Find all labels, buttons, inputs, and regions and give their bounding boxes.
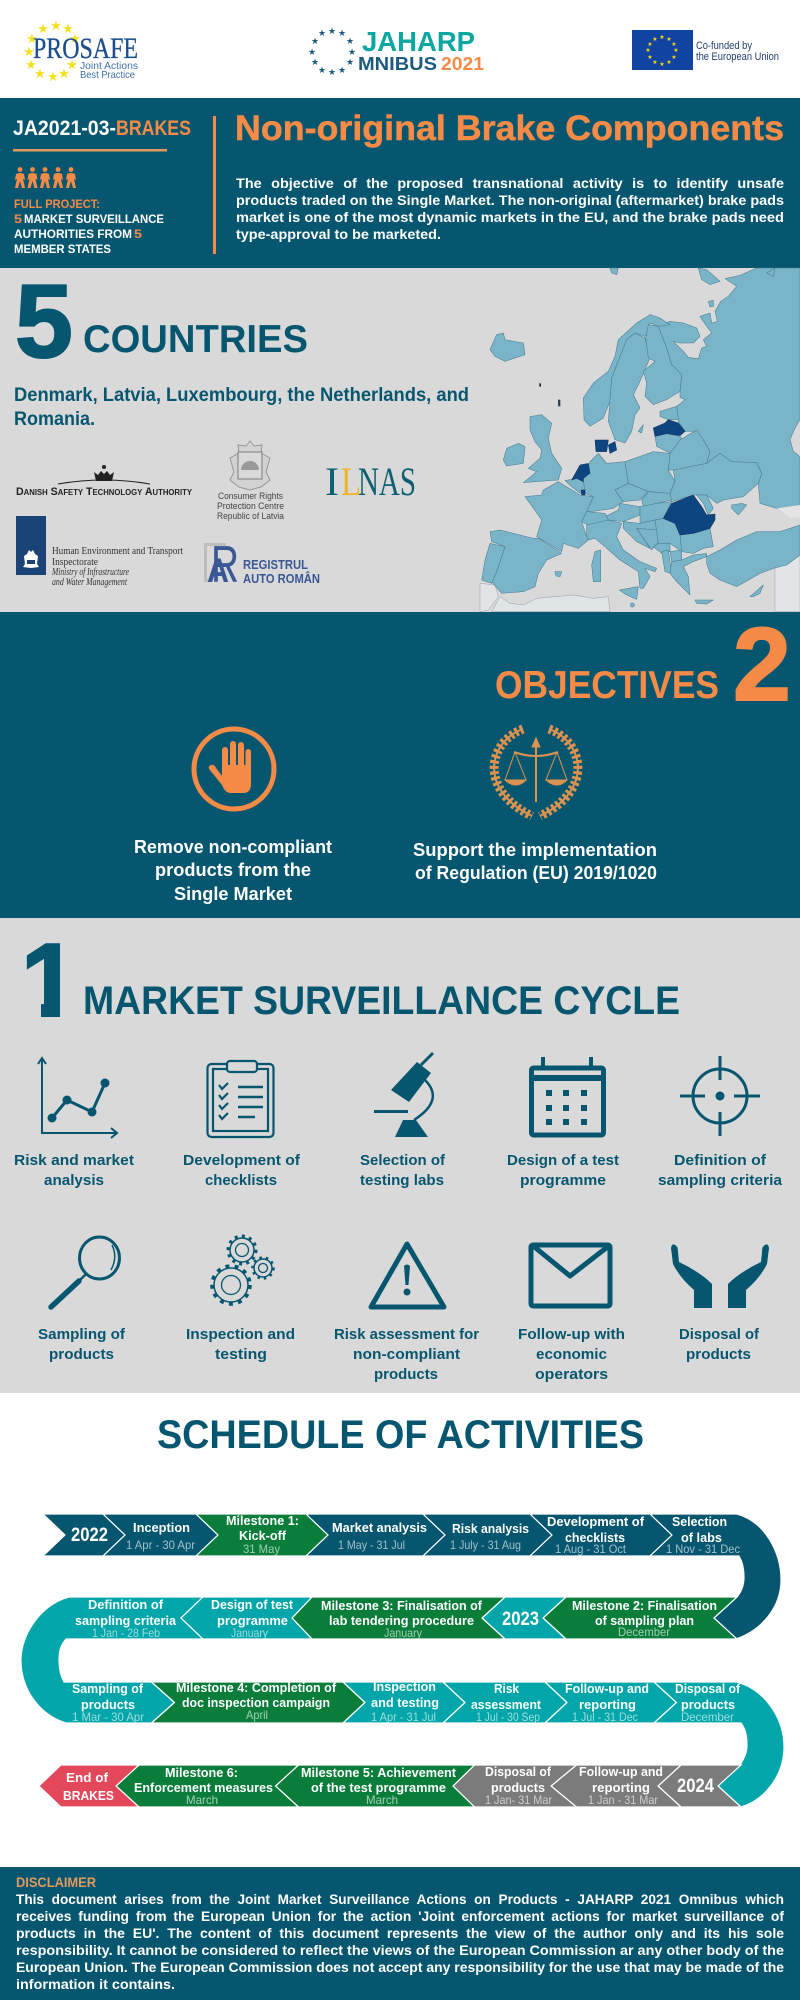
logo: EU co-funded: Co-funded by bbox=[696, 40, 752, 52]
logo: EU co-funded bbox=[632, 30, 779, 70]
row 3 labels: December bbox=[681, 1710, 734, 1724]
full project text: 5 bbox=[134, 227, 142, 241]
label: definition of sampling criteria: sampling criteria bbox=[658, 1172, 783, 1189]
logo: PROSAFE: ★ bbox=[47, 69, 59, 84]
row 4 labels: March bbox=[366, 1793, 398, 1807]
row 1 labels: checklists bbox=[565, 1530, 625, 1545]
row 1 labels: Selection bbox=[672, 1514, 727, 1529]
row 4: 2024 bbox=[39, 1765, 741, 1807]
row 3 labels bbox=[72, 1679, 741, 1724]
label: disposal of products bbox=[679, 1326, 760, 1363]
row 4 labels: Milestone 6: bbox=[165, 1765, 238, 1780]
logo: PROSAFE: ★ bbox=[37, 21, 49, 36]
map of Europe bbox=[480, 268, 800, 612]
row 3 labels: Inspection bbox=[373, 1679, 436, 1694]
disclaimer text: products in the EU'. The content of this document represents the view of the author only and its his sole bbox=[16, 1925, 784, 1941]
objective text: remove products: Remove non-compliant bbox=[134, 837, 332, 857]
row 1 labels bbox=[71, 1513, 740, 1556]
row 1 labels: of labs bbox=[681, 1530, 722, 1545]
logo: EU co-funded: ★ bbox=[647, 54, 653, 61]
logo: JAHARP Omnibus 2021: ★ bbox=[338, 28, 346, 38]
row 3 labels: doc inspection campaign bbox=[182, 1695, 330, 1710]
logo: JAHARP Omnibus 2021: ★ bbox=[346, 36, 354, 46]
label: selection of testing labs: testing labs bbox=[360, 1172, 444, 1189]
label: inspection and testing bbox=[186, 1326, 295, 1363]
country list bbox=[14, 384, 469, 430]
logo: PROSAFE: ★ bbox=[34, 66, 46, 81]
row 2 labels: 1 Jan - 28 Feb bbox=[92, 1626, 160, 1640]
logo: PROSAFE: ★ bbox=[58, 66, 70, 81]
row 2: 2023 bbox=[181, 1597, 737, 1639]
row 2 labels: sampling criteria bbox=[75, 1613, 177, 1628]
icon: magnifier bbox=[51, 1237, 120, 1307]
logo: PROSAFE: Joint Actions bbox=[80, 60, 138, 72]
objective text: remove products bbox=[134, 837, 332, 904]
row 1 labels: 31 May bbox=[243, 1542, 280, 1556]
icon: clipboard checklist bbox=[208, 1061, 274, 1137]
label: design of a test programme bbox=[507, 1152, 619, 1189]
row 1: 2022 bbox=[43, 1514, 781, 1639]
label: risk and market analysis: analysis bbox=[44, 1172, 104, 1189]
logo: Registrul Auto Roman bbox=[204, 536, 320, 594]
logo: EU co-funded: ★ bbox=[673, 47, 679, 54]
logo: Consumer Rights Protection Centre bbox=[217, 441, 285, 522]
row 4 labels: March bbox=[186, 1793, 218, 1807]
logo: JAHARP Omnibus 2021: ★ bbox=[328, 67, 336, 77]
icon: gears bbox=[212, 1236, 274, 1304]
row 2 labels: Milestone 3: Finalisation of bbox=[321, 1598, 483, 1613]
logo: Consumer Rights Protection Centre: Republic of Latvia bbox=[217, 511, 285, 522]
label: sampling of products: products bbox=[49, 1346, 114, 1363]
row 4 labels: Follow-up and bbox=[579, 1764, 663, 1779]
label: disposal of products: products bbox=[686, 1346, 751, 1363]
logo: EU co-funded: ★ bbox=[666, 59, 672, 66]
logo: Human Environment and Transport Inspectorate: Inspectorate bbox=[52, 557, 99, 568]
row 4 labels: products bbox=[491, 1780, 545, 1795]
logo: EU co-funded: ★ bbox=[652, 59, 658, 66]
logo: EU co-funded: ★ bbox=[652, 36, 658, 43]
logo: Consumer Rights Protection Centre: Consumer Rights bbox=[218, 491, 283, 502]
logo: Registrul Auto Roman: REGISTRUL bbox=[243, 557, 308, 572]
row 4 labels: Enforcement measures bbox=[134, 1780, 273, 1795]
row 3 labels: products bbox=[681, 1697, 735, 1712]
icon: target bbox=[680, 1056, 760, 1136]
label: development of checklists: Development of bbox=[183, 1152, 301, 1169]
logo: EU co-funded: ★ bbox=[647, 41, 653, 48]
big number 2: 2 bbox=[733, 607, 791, 723]
logo: JAHARP Omnibus 2021: ★ bbox=[328, 26, 336, 36]
row 1 labels: Milestone 1: bbox=[226, 1513, 299, 1528]
logo: JAHARP Omnibus 2021: ★ bbox=[318, 28, 326, 38]
full project text: 5 bbox=[14, 212, 22, 226]
label: follow-up bbox=[518, 1326, 625, 1383]
logo: ILNAS: I bbox=[325, 459, 339, 504]
row 4 labels bbox=[63, 1764, 714, 1807]
logo: JAHARP Omnibus 2021: MNIBUS bbox=[358, 54, 437, 74]
timeline: schedule ribbon bbox=[21, 1513, 784, 1807]
label: inspection and testing: Inspection and bbox=[186, 1326, 295, 1343]
row 4 labels: of the test programme bbox=[311, 1780, 446, 1795]
label: definition of sampling criteria bbox=[658, 1152, 783, 1189]
row 4 labels: Milestone 5: Achievement bbox=[301, 1765, 457, 1780]
logo: JAHARP Omnibus 2021: ★ bbox=[308, 47, 316, 57]
logo: EU co-funded: the European Union bbox=[696, 51, 779, 63]
icon: calendar bbox=[530, 1057, 606, 1135]
row 3 labels: Risk bbox=[494, 1681, 520, 1696]
icon: envelope bbox=[531, 1245, 610, 1306]
row 1 labels: Kick-off bbox=[239, 1528, 287, 1543]
icon: stop hand bbox=[194, 729, 274, 809]
label: development of checklists bbox=[183, 1152, 301, 1189]
row 1 labels: 1 July - 31 Aug bbox=[450, 1538, 521, 1552]
logo: EU co-funded: ★ bbox=[659, 61, 665, 68]
row 2 labels: Definition of bbox=[88, 1597, 164, 1612]
disclaimer text: European Union. The European Commission does not accept any responsibility for the use that may be made of the bbox=[16, 1959, 784, 1975]
objective text: support regulation: Support the implementation bbox=[413, 840, 657, 860]
icon: warning triangle bbox=[371, 1244, 444, 1307]
row 3 labels: products bbox=[81, 1697, 135, 1712]
label: risk and market analysis: Risk and market bbox=[14, 1152, 134, 1169]
icon: five people bbox=[15, 167, 76, 188]
logo: JAHARP Omnibus 2021: JAHARP bbox=[362, 26, 475, 57]
row 4 labels: 2024 bbox=[677, 1776, 714, 1797]
logo: JAHARP Omnibus 2021: ★ bbox=[318, 65, 326, 75]
country list: Denmark, Latvia, Luxembourg, the Netherlands, and bbox=[14, 384, 469, 406]
intro paragraph bbox=[236, 176, 785, 242]
row 1 labels: 1 Aug - 31 Oct bbox=[555, 1542, 627, 1556]
label: follow-up: operators bbox=[535, 1366, 608, 1383]
disclaimer text: information it contains. bbox=[16, 1976, 175, 1992]
heading: market surveillance cycle: MARKET SURVEILLANCE CYCLE bbox=[83, 979, 680, 1023]
row 3 labels: 1 Apr - 31 Jul bbox=[371, 1710, 436, 1724]
row 3 labels: Follow-up and bbox=[565, 1681, 649, 1696]
project code bbox=[13, 117, 191, 140]
row 4 labels: End of bbox=[66, 1770, 109, 1785]
logo: JAHARP Omnibus 2021: 2021 bbox=[441, 54, 484, 74]
intro paragraph: products traded on the Single Market. The non-original (aftermarket) brake pads bbox=[236, 193, 784, 208]
row 1 labels: 2022 bbox=[71, 1525, 108, 1546]
logo: JAHARP Omnibus 2021: ★ bbox=[311, 36, 319, 46]
row 2 labels: December bbox=[618, 1625, 670, 1639]
logo: Registrul Auto Roman: R bbox=[211, 536, 239, 594]
panel: logo header bbox=[23, 18, 779, 84]
label: sampling of products bbox=[38, 1326, 126, 1363]
heading: objectives: OBJECTIVES bbox=[495, 664, 719, 707]
disclaimer text: receives funding from the European Union for the action 'Joint enforcement actions for market surveillance of bbox=[16, 1908, 784, 1924]
row 2 labels: Milestone 2: Finalisation bbox=[572, 1598, 717, 1613]
logo: PROSAFE: ★ bbox=[26, 31, 38, 46]
logo: EU co-funded: ★ bbox=[671, 41, 677, 48]
row 3 labels: Milestone 4: Completion of bbox=[176, 1680, 337, 1695]
row 1 labels: Development of bbox=[547, 1514, 645, 1529]
objective text: support regulation: of Regulation (EU) 2019/1020 bbox=[415, 863, 657, 883]
country list: Romania. bbox=[14, 408, 95, 430]
project code: BRAKES bbox=[116, 117, 191, 140]
full project text: MEMBER STATES bbox=[14, 242, 111, 256]
logo: ILNAS: L bbox=[341, 459, 361, 504]
logo: EU co-funded: ★ bbox=[671, 54, 677, 61]
label: risk assessment: Risk assessment for bbox=[334, 1326, 479, 1343]
row 4 labels: reporting bbox=[592, 1780, 650, 1795]
logo: Human Environment and Transport Inspectorate: Ministry of Infrastructure bbox=[51, 567, 129, 578]
row 3 labels: 1 Jul - 31 Dec bbox=[572, 1710, 638, 1724]
disclaimer text: This document arises from the Joint Market Surveillance Actions on Products - JAHARP 2021 Omnibus which bbox=[16, 1891, 784, 1907]
icon: open hands bbox=[671, 1244, 769, 1308]
panel: disclaimer bbox=[0, 1867, 800, 2000]
row 2 labels bbox=[75, 1597, 717, 1640]
title: Non-original Brake Components bbox=[235, 109, 784, 148]
objective text: remove products: Single Market bbox=[174, 884, 292, 904]
intro paragraph: The objective of the proposed transnational activity is to identify unsafe bbox=[236, 176, 785, 191]
logo: PROSAFE: ★ bbox=[25, 57, 37, 72]
label: risk assessment: products bbox=[374, 1366, 438, 1383]
logo: PROSAFE: ★ bbox=[23, 44, 35, 59]
row 1 labels: Risk analysis bbox=[452, 1521, 529, 1536]
logo: Registrul Auto Roman: AUTO ROMÂN bbox=[243, 571, 320, 586]
logo: Human Environment and Transport Inspectorate: Human Environment and Transport bbox=[52, 546, 183, 557]
label: inspection and testing: testing bbox=[215, 1346, 267, 1363]
logo: JAHARP Omnibus 2021: ★ bbox=[348, 47, 356, 57]
logo: PROSAFE bbox=[23, 18, 138, 84]
intro paragraph: type-approval to be marketed. bbox=[236, 227, 441, 242]
disclaimer text bbox=[16, 1891, 784, 1992]
icon: microscope bbox=[374, 1053, 433, 1137]
label: follow-up: economic bbox=[536, 1346, 607, 1363]
row 2 labels: Design of test bbox=[211, 1597, 294, 1612]
full project text: AUTHORITIES FROM bbox=[14, 227, 132, 241]
objective text: remove products: products from the bbox=[155, 860, 311, 880]
logo: PROSAFE: ★ bbox=[69, 31, 81, 46]
intro paragraph: market is one of the most dynamic markets in the EU, and the brake pads need bbox=[236, 210, 784, 225]
disclaimer text: responsibility. It cannot be considered to reflect the views of the European Commission ar any other body of the bbox=[16, 1942, 784, 1958]
disclaimer heading: DISCLAIMER bbox=[16, 1874, 96, 1890]
row 3 labels: April bbox=[246, 1708, 268, 1722]
heading: countries: COUNTRIES bbox=[83, 318, 308, 361]
row 4 labels: Disposal of bbox=[485, 1764, 552, 1779]
label: development of checklists: checklists bbox=[205, 1172, 277, 1189]
logo: EU co-funded: ★ bbox=[666, 36, 672, 43]
logo: Consumer Rights Protection Centre: Protection Centre bbox=[217, 501, 284, 512]
label: definition of sampling criteria: Definition of bbox=[674, 1152, 767, 1169]
label: design of a test programme: Design of a test bbox=[507, 1152, 619, 1169]
row 2 labels: January bbox=[231, 1626, 268, 1640]
panel: project band bbox=[0, 98, 800, 268]
label: follow-up: Follow-up with bbox=[518, 1326, 625, 1343]
row 1 labels: 1 May - 31 Jul bbox=[338, 1538, 405, 1552]
big number 5: 5 bbox=[15, 264, 73, 380]
panel: objectives bbox=[0, 607, 800, 918]
row 3 labels: assessment bbox=[471, 1697, 542, 1712]
row 3 labels: 1 Jul - 30 Sep bbox=[476, 1710, 540, 1724]
row 3 labels: and testing bbox=[371, 1695, 439, 1710]
logo: Danish Safety Technology Authority: Danish Safety Technology Authority bbox=[16, 486, 193, 498]
logo: PROSAFE: ★ bbox=[62, 21, 74, 36]
row 4 labels: 1 Jan- 31 Mar bbox=[485, 1793, 552, 1807]
label: sampling of products: Sampling of bbox=[38, 1326, 126, 1343]
logo: JAHARP Omnibus 2021: ★ bbox=[338, 65, 346, 75]
row 1 labels: 1 Nov - 31 Dec bbox=[666, 1542, 740, 1556]
logo: PROSAFE: ★ bbox=[66, 57, 78, 72]
logo: ILNAS bbox=[325, 459, 416, 504]
logo: PROSAFE: ★ bbox=[50, 18, 62, 33]
label: design of a test programme: programme bbox=[520, 1172, 606, 1189]
logo: PROSAFE: PROSAFE bbox=[33, 32, 138, 65]
logo: Registrul Auto Roman: A bbox=[207, 552, 229, 590]
row 2 labels: January bbox=[384, 1626, 422, 1640]
label: selection of testing labs bbox=[360, 1152, 446, 1189]
logo: PROSAFE: Best Practice bbox=[80, 69, 135, 81]
row 4 labels: BRAKES bbox=[63, 1788, 114, 1803]
row 1 labels: 1 Apr - 30 Apr bbox=[126, 1538, 195, 1552]
row 2 labels: programme bbox=[217, 1613, 288, 1628]
label: disposal of products: Disposal of bbox=[679, 1326, 760, 1343]
label: risk assessment: non-compliant bbox=[353, 1346, 460, 1363]
row 3 labels: Sampling of bbox=[72, 1681, 144, 1696]
row 4 labels: 1 Jan - 31 Mar bbox=[588, 1793, 658, 1807]
full project text: FULL PROJECT: bbox=[14, 197, 100, 211]
label: risk assessment bbox=[334, 1326, 479, 1383]
row 2 labels: of sampling plan bbox=[595, 1613, 694, 1628]
objective text: support regulation bbox=[413, 840, 657, 883]
row 3 labels: 1 Mar - 30 Apr bbox=[72, 1710, 144, 1724]
logo: Human Environment and Transport Inspectorate bbox=[16, 516, 183, 588]
row 2 and 3 left curve bbox=[21, 1597, 203, 1723]
row 3 labels: reporting bbox=[579, 1697, 636, 1712]
row 1 labels: Inception bbox=[133, 1520, 190, 1535]
big number 1: 1 bbox=[21, 923, 79, 1039]
logo: EU co-funded: ★ bbox=[645, 47, 651, 54]
logo: EU co-funded: ★ bbox=[659, 34, 665, 41]
full project text: MARKET SURVEILLANCE bbox=[24, 212, 164, 226]
logo: JAHARP Omnibus 2021: ★ bbox=[346, 57, 354, 67]
row 2 labels: 2023 bbox=[502, 1609, 539, 1630]
heading: schedule of activities: SCHEDULE OF ACTIVITIES bbox=[157, 1413, 644, 1457]
logo: JAHARP Omnibus 2021 bbox=[308, 26, 484, 77]
full project text bbox=[14, 197, 164, 256]
logo: Danish Safety Technology Authority bbox=[16, 465, 193, 498]
row 3 labels: Disposal of bbox=[675, 1681, 741, 1696]
project code: JA2021-03- bbox=[13, 117, 116, 140]
panel: 5 countries bbox=[0, 264, 800, 612]
label: selection of testing labs: Selection of bbox=[360, 1152, 446, 1169]
logo: Human Environment and Transport Inspectorate: and Water Management bbox=[52, 577, 127, 588]
logo: ILNAS: NAS bbox=[358, 459, 416, 504]
row 3 bbox=[152, 1682, 784, 1807]
label: risk and market analysis bbox=[14, 1152, 134, 1189]
icon: chart bbox=[38, 1058, 117, 1138]
panel: market surveillance cycle bbox=[0, 918, 800, 1393]
row 2 labels: lab tendering procedure bbox=[329, 1613, 474, 1628]
icon: scales wreath bbox=[494, 729, 578, 816]
row 1 labels: Market analysis bbox=[332, 1520, 427, 1535]
logo: JAHARP Omnibus 2021: ★ bbox=[311, 57, 319, 67]
